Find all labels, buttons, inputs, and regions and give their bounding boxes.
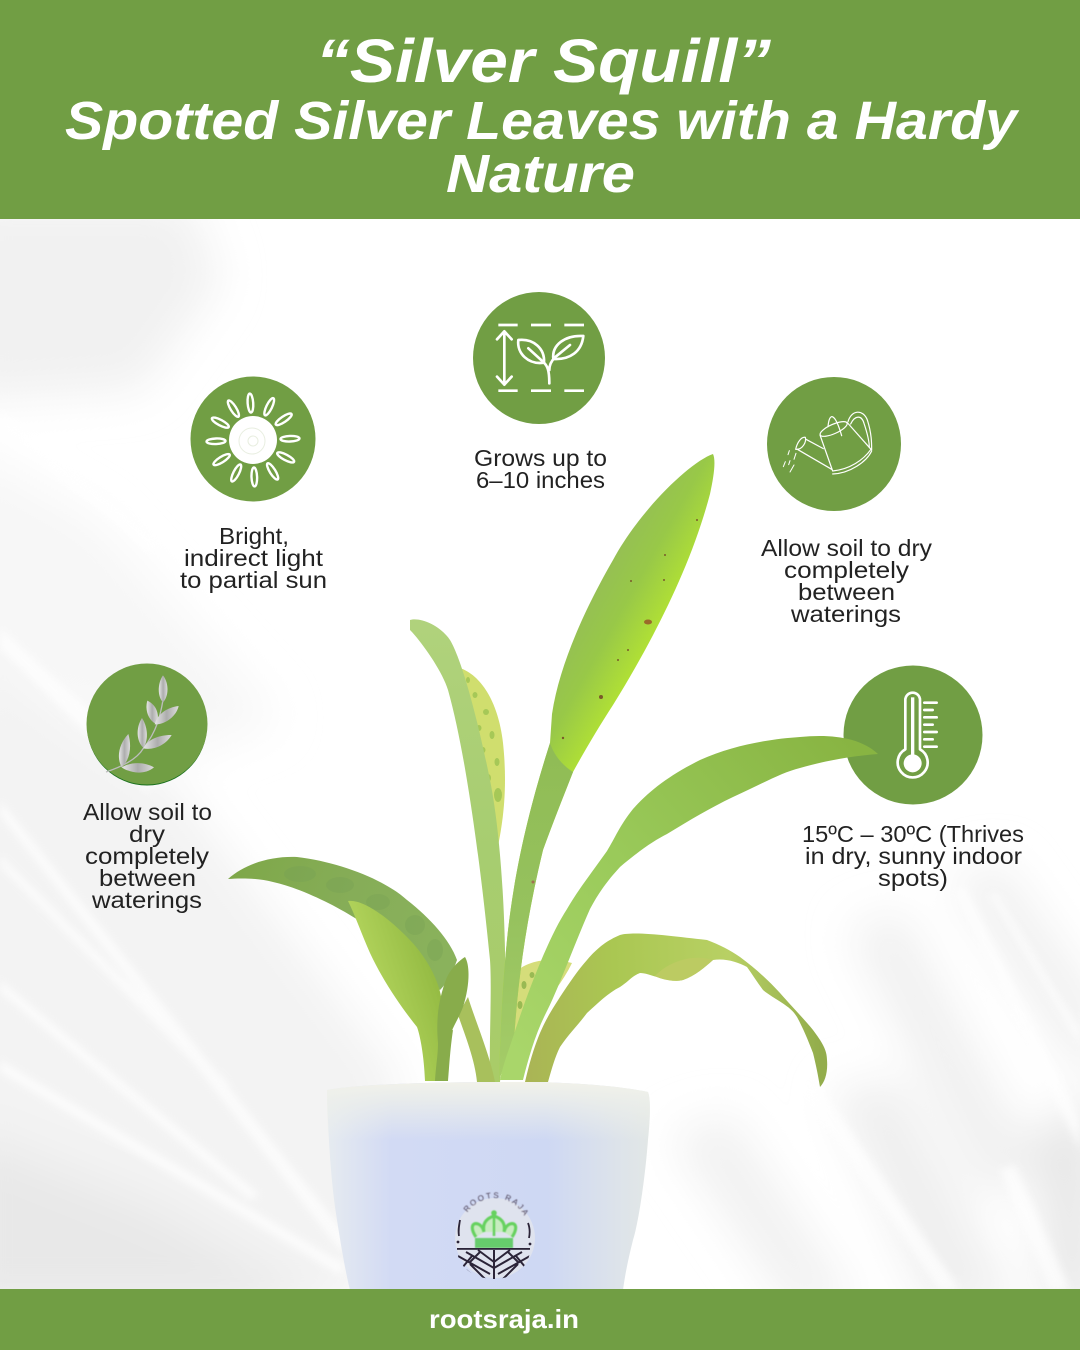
text: light requirement [180, 523, 327, 593]
text: soil: waterings [91, 887, 202, 913]
pot logo: ROOTS RAJA [463, 1192, 528, 1216]
text: temperature: 15ºC – 30ºC (Thrives [802, 821, 1024, 847]
text: watering: Allow soil to dry [761, 535, 933, 561]
icon: sun [190, 376, 316, 502]
care item: watering [761, 377, 933, 627]
text: soil: completely [85, 843, 210, 869]
text: height: 6–10 inches [476, 467, 605, 493]
title [65, 27, 1020, 204]
text: watering: between [798, 579, 895, 605]
icon: thermometer [844, 666, 982, 804]
care item: size [473, 292, 607, 493]
icon: watering can [767, 377, 901, 511]
bottom right drooping leaf [525, 934, 827, 1087]
care item: light [180, 376, 327, 593]
smallest leaf [435, 957, 469, 1081]
right long leaf [500, 736, 878, 1080]
header band [0, 0, 1080, 219]
small left leaf [348, 901, 442, 1081]
left dark green leaf [228, 857, 457, 990]
tall central leaf [499, 454, 714, 1080]
stem [458, 997, 495, 1082]
text: watering: completely [784, 557, 910, 583]
text: temperature [802, 821, 1024, 891]
text: height: Grows up to [474, 445, 607, 471]
text: temperature: in dry, sunny indoor [805, 843, 1022, 869]
text: watering: waterings [790, 601, 901, 627]
text: light requirement: indirect light [184, 545, 324, 571]
left upright leaf with yellow spotted blade [410, 619, 505, 1082]
text: soil: dry [129, 821, 166, 847]
text: light requirement: Bright, [219, 523, 289, 549]
pot [327, 1082, 650, 1289]
care item: temperature [802, 666, 1024, 891]
care item: soil [83, 664, 212, 913]
text: light requirement: to partial sun [180, 567, 327, 593]
back spotted leaf [508, 960, 572, 1045]
plant [228, 454, 878, 1087]
text: soil: Allow soil to [83, 799, 212, 825]
title: Nature [446, 144, 635, 204]
icon: silver sprig [86, 664, 208, 786]
footer band [0, 1289, 1080, 1350]
text: soil: between [99, 865, 196, 891]
footer url: rootsraja.in [429, 1304, 579, 1334]
text: temperature: spots) [878, 865, 948, 891]
icon: plant height [473, 292, 605, 424]
title: “Silver Squill” [316, 27, 772, 95]
text: watering [761, 535, 933, 627]
pot logo [455, 1192, 535, 1279]
text: height [474, 445, 607, 493]
title: Spotted Silver Leaves with a Hardy [65, 91, 1020, 151]
text: soil [83, 799, 212, 913]
